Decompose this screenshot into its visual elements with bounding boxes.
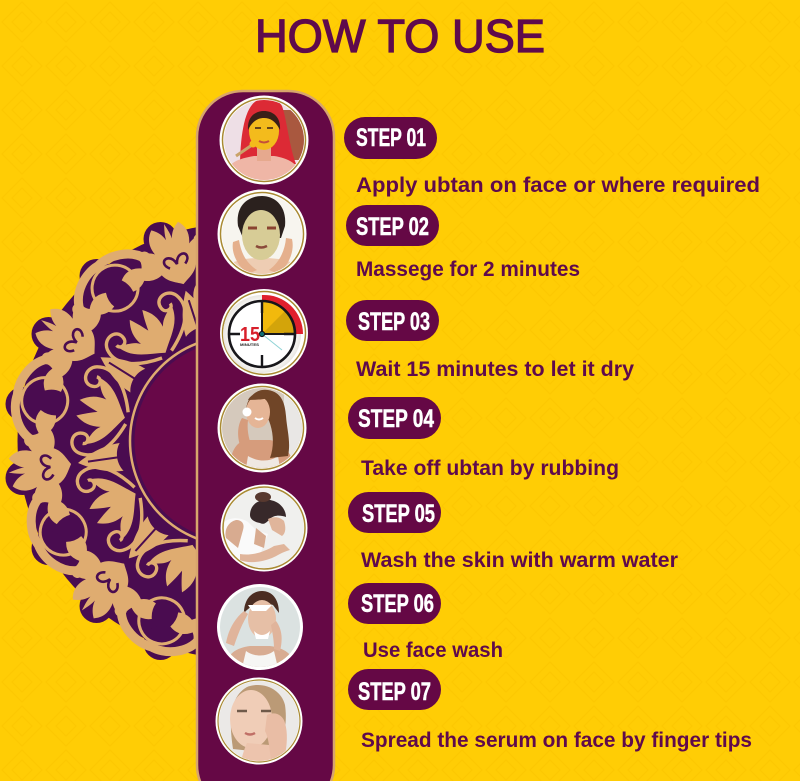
photo: taking off ubtan [218, 384, 306, 472]
step 06: Use face wash [363, 639, 503, 662]
step 03: Wait 15 minutes to let it dry [356, 358, 634, 381]
step 03 [346, 300, 634, 381]
step 01: STEP 01 [356, 124, 426, 152]
step 02: STEP 02 [356, 213, 429, 241]
step 06: STEP 06 [361, 590, 434, 618]
step 07: Spread the serum on face by finger tips [361, 729, 752, 752]
step 02 [346, 205, 580, 281]
step 01: Apply ubtan on face or where required [356, 174, 760, 197]
photo: serum [216, 678, 302, 764]
step 02: Massege for 2 minutes [356, 258, 580, 281]
step 07: STEP 07 [358, 678, 431, 706]
title: HOW TO USE [255, 10, 545, 62]
photo: washing skin [220, 484, 308, 572]
central panel with photos [197, 91, 334, 781]
step 03: STEP 03 [358, 308, 430, 336]
photo: applying ubtan [220, 96, 308, 184]
icon: 15 minute clock [220, 289, 308, 377]
step 04 [348, 397, 619, 480]
step 05: Wash the skin with warm water [361, 549, 678, 572]
mandala ornament [6, 222, 196, 660]
step 05: STEP 05 [362, 500, 435, 528]
step 06 [348, 583, 503, 662]
step 07 [348, 669, 752, 752]
photo: face wash [217, 584, 303, 670]
icon: 15 minute clock: 15 [240, 324, 260, 346]
icon: 15 minute clock: MINUTES [240, 342, 259, 347]
photo: massage [218, 190, 306, 278]
step 01 [344, 117, 760, 197]
step 05 [348, 492, 678, 572]
step 04: STEP 04 [358, 405, 434, 433]
step 04: Take off ubtan by rubbing [361, 457, 619, 480]
